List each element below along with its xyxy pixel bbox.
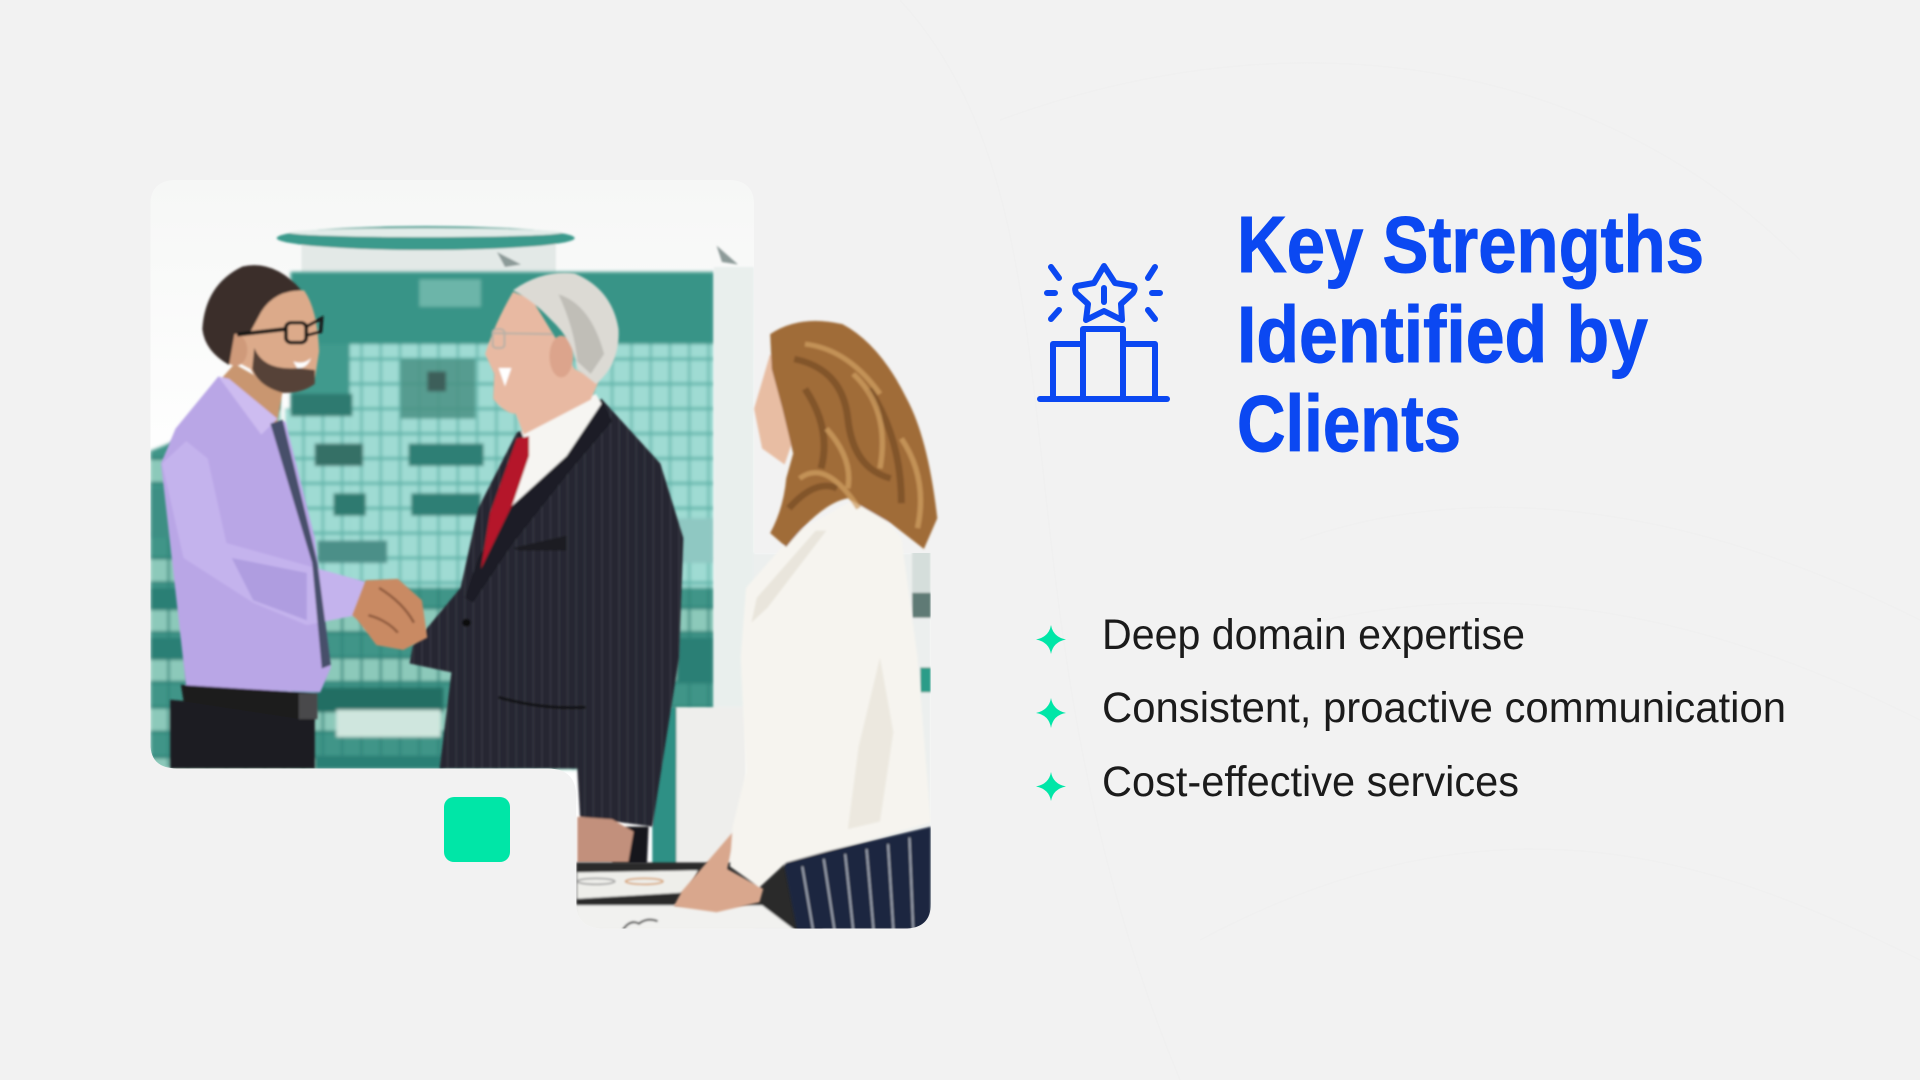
accent: green rounded square — [444, 797, 510, 862]
icon: podium base — [1040, 396, 1167, 402]
title line 1: Key Strengths — [1237, 200, 1704, 289]
title — [1237, 200, 1704, 468]
icon: star exclamation — [1101, 288, 1107, 302]
bullet 2: Consistent, proactive communication — [1102, 684, 1786, 732]
person: senior man in dark suit — [410, 273, 683, 864]
table and documents — [576, 862, 823, 930]
icon: podium with star — [1040, 266, 1167, 399]
bullet list — [1036, 611, 1786, 806]
photo background: glass building — [150, 272, 714, 769]
icon: star rays — [1047, 267, 1160, 319]
person: woman in white blazer — [674, 321, 937, 930]
bullet 3: Cost-effective services — [1102, 758, 1519, 806]
icon: star — [1075, 266, 1134, 320]
handshake — [352, 579, 427, 650]
photo: business handshake with colleague — [150, 180, 937, 931]
photo background: glass tower roof — [277, 226, 738, 273]
title line 3: Clients — [1237, 379, 1461, 468]
photo background: sky — [150, 294, 652, 862]
bullet 1: Deep domain expertise — [1102, 611, 1525, 659]
person: man in purple shirt — [161, 265, 368, 768]
slide canvas — [150, 214, 1784, 929]
title line 2: Identified by — [1237, 290, 1648, 379]
icon: podium bars — [1053, 329, 1155, 399]
photo background: white columns and right window — [652, 267, 931, 931]
